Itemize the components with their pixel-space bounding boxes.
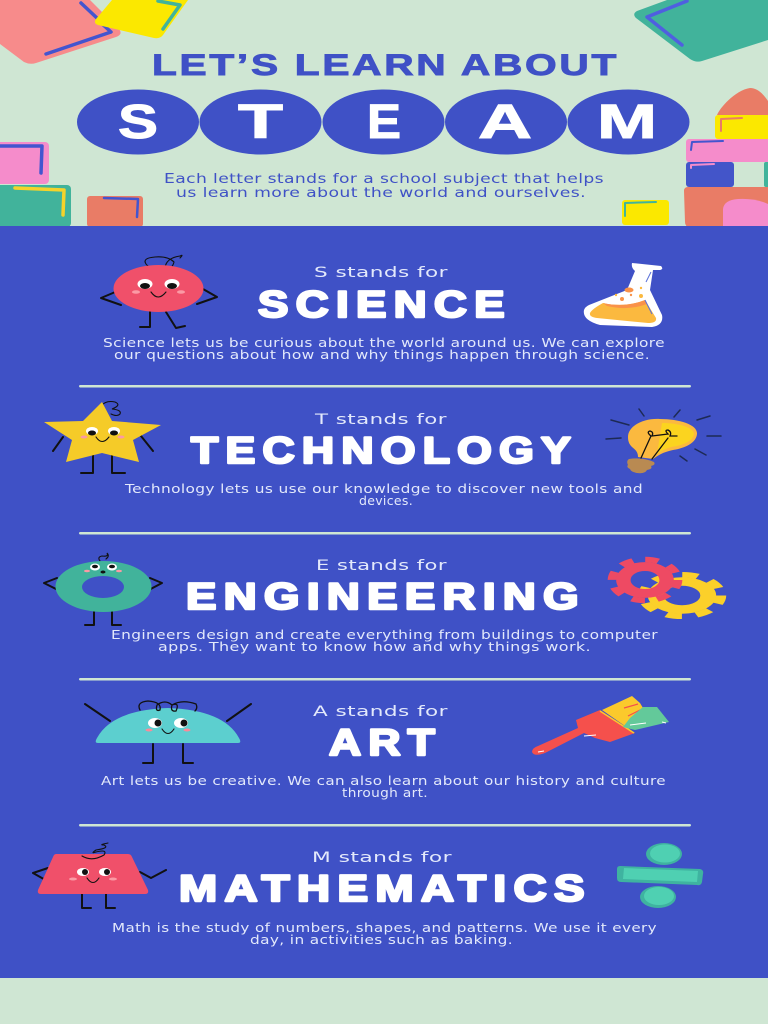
technology section: [44, 402, 721, 508]
decorative blocks: top right: [634, 0, 768, 62]
science text: [103, 336, 665, 362]
engineering text: apps. They want to know how and why things work.: [158, 640, 591, 654]
mathematics text: Math is the study of numbers, shapes, and patterns. We use it every: [112, 921, 657, 935]
technology subheading: T stands for: [313, 412, 447, 428]
science subheading: S stands for: [314, 265, 448, 281]
engineering heading: ENGINEERING: [186, 576, 586, 617]
engineering subheading: E stands for: [316, 558, 447, 574]
icon: paint brush: [532, 696, 669, 755]
technology text: devices.: [359, 494, 413, 508]
engineering text: [111, 628, 658, 654]
engineering character: [44, 553, 162, 625]
main blue panel: [0, 226, 768, 978]
decorative blocks: left stack: [0, 142, 143, 227]
technology character: [44, 402, 161, 473]
icon: flask: [584, 263, 662, 327]
art text: through art.: [342, 786, 428, 800]
STEAM letter circles: [77, 90, 690, 154]
mathematics text: [112, 921, 657, 947]
icon: division sign: [617, 843, 703, 908]
art character: [85, 701, 251, 763]
STEAM letter circles: T: [238, 96, 283, 149]
art subheading: A stands for: [313, 704, 448, 720]
technology heading: TECHNOLOGY: [191, 430, 578, 471]
STEAM letter circles: E: [367, 96, 401, 149]
engineering text: Engineers design and create everything from buildings to computer: [111, 628, 658, 642]
decorative blocks: right stack: [622, 88, 768, 227]
icon: light bulb: [606, 409, 721, 473]
STEAM letter circles: M: [597, 96, 657, 149]
science character: [101, 255, 217, 328]
mathematics heading: MATHEMATICS: [179, 868, 592, 909]
science text: Science lets us be curious about the world around us. We can explore: [103, 336, 665, 350]
art text: [101, 774, 666, 800]
mathematics character: [33, 843, 166, 908]
science heading: SCIENCE: [258, 284, 512, 325]
art text: Art lets us be creative. We can also learn about our history and culture: [101, 774, 666, 788]
mathematics text: day, in activities such as baking.: [250, 933, 513, 947]
art section: [85, 696, 669, 800]
art heading: ART: [329, 722, 442, 763]
mathematics subheading: M stands for: [312, 850, 452, 866]
mathematics section: [33, 843, 703, 947]
title: LET’S LEARN ABOUT: [152, 49, 619, 82]
intro text: Each letter stands for a school subject that helps: [164, 171, 604, 187]
intro text: [164, 171, 604, 201]
science section: [101, 255, 665, 362]
science text: our questions about how and why things happen through science.: [114, 348, 650, 362]
technology text: [124, 482, 643, 508]
intro text: us learn more about the world and ourselves.: [176, 185, 586, 201]
STEAM letter circles: S: [118, 96, 158, 149]
decorative blocks: top left: [0, 0, 188, 64]
STEAM letter circles: A: [478, 96, 532, 149]
icon: gears: [612, 560, 721, 616]
engineering section: [44, 553, 721, 654]
technology text: Technology lets us use our knowledge to discover new tools and: [124, 482, 643, 496]
